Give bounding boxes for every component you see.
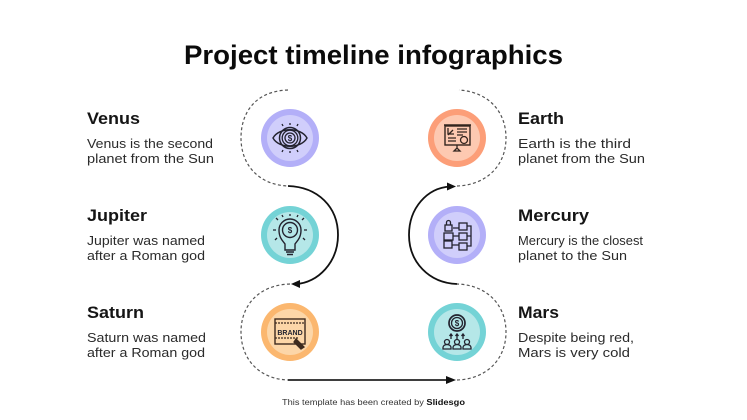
text: Earth description: Earth is the third	[518, 136, 631, 151]
text: Jupiter description: after a Roman god	[87, 248, 205, 263]
text: Mars description: Despite being red,	[518, 330, 634, 345]
heading: Earth: Earth	[518, 110, 564, 128]
heading: Jupiter: Jupiter	[87, 207, 148, 225]
icon: light bulb with dollar: $	[288, 226, 293, 235]
text: Mars description: Mars is very cold	[518, 345, 630, 360]
icon: eye with dollar: $	[288, 134, 293, 143]
text: Mercury description	[518, 233, 643, 263]
heading: Saturn: Saturn	[87, 304, 144, 322]
icon: brand banner: BRAND	[277, 330, 303, 337]
text: Mars description	[518, 330, 634, 360]
text: Mercury description: planet to the Sun	[518, 248, 627, 263]
icon: light bulb with dollar	[261, 206, 319, 264]
text: Earth description	[518, 136, 645, 166]
heading: Venus: Venus	[87, 110, 140, 128]
text: Saturn description: Saturn was named	[87, 330, 206, 345]
panel: Mercury	[518, 207, 643, 263]
timeline path	[241, 90, 506, 384]
panel: Mars	[518, 304, 634, 360]
heading: Mercury: Mercury	[518, 207, 590, 225]
text: Venus description: planet from the Sun	[87, 151, 214, 166]
text: Jupiter description: Jupiter was named	[87, 233, 205, 248]
text: Venus description: Venus is the second	[87, 136, 213, 151]
text: Venus description	[87, 136, 214, 166]
text: Saturn description	[87, 330, 206, 360]
panel: Jupiter	[87, 207, 205, 263]
panel: Venus	[87, 110, 214, 166]
heading: Mars: Mars	[518, 304, 559, 322]
text: Earth description: planet from the Sun	[518, 151, 645, 166]
footer credit: This template has been created by Slidesgo	[282, 397, 465, 407]
icon: brand banner	[261, 303, 319, 361]
icon: people and coin	[428, 303, 486, 361]
icon: data flow	[428, 206, 486, 264]
text: Mercury description: Mercury is the closest	[518, 233, 643, 248]
icon: people and coin: $	[455, 319, 460, 328]
text: Saturn description: after a Roman god	[87, 345, 205, 360]
icon: eye with dollar	[261, 109, 319, 167]
panel: Earth	[518, 110, 645, 166]
text: Jupiter description	[87, 233, 205, 263]
icon: presentation board	[428, 109, 486, 167]
title: Project timeline infographics	[184, 40, 563, 70]
panel: Saturn	[87, 304, 206, 360]
